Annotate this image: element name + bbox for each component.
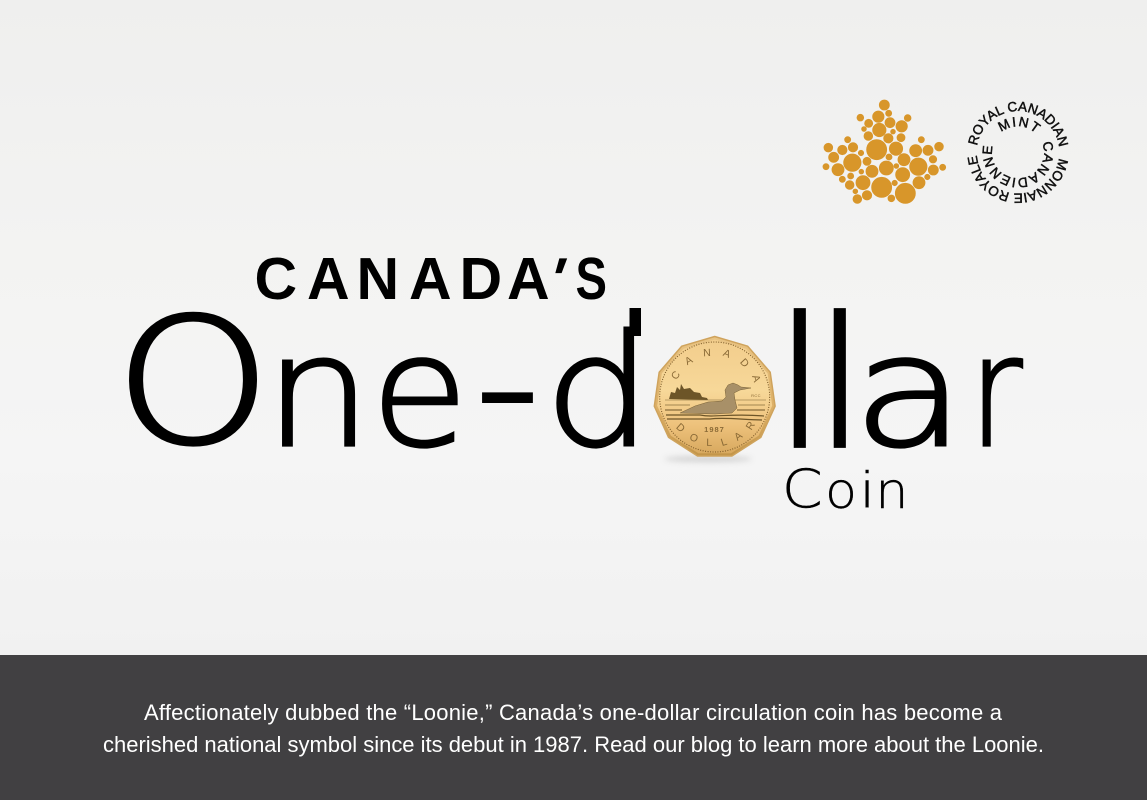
title: One-dollar: d — [544, 303, 652, 482]
subheading: Coin — [782, 459, 908, 521]
footer description text: Affectionately dubbed the “Loonie,” Canada’s one-dollar circulation coin has become a — [144, 700, 1003, 725]
title: One-dollar: o — [668, 291, 766, 478]
title: One-dollar: e — [371, 302, 468, 482]
icon: loonie coin — [654, 336, 776, 457]
subheading: Coin: i — [859, 462, 876, 519]
coin: loon — [680, 383, 751, 414]
title: One-dollar: O — [115, 282, 271, 484]
footer description text: cherished national symbol since its debut in 1987. Read our blog to learn more about the Loonie. — [103, 732, 1044, 757]
subheading: Coin: o — [825, 462, 857, 519]
title: One-dollar: - — [475, 281, 540, 490]
coin text: Canada: CANADA — [672, 348, 760, 383]
logo: maple leaf of gold circles — [823, 100, 946, 203]
title: One-dollar: l — [774, 279, 827, 489]
wordmark: Monnaie Royale: MONNAIE ROYALE — [967, 156, 1068, 204]
wordmark: Canadienne: CANADIENNE — [982, 142, 1054, 188]
title: One-dollar: n — [264, 303, 372, 482]
title: One-dollar — [115, 279, 1023, 490]
heading: Canada's: S — [576, 247, 607, 312]
coin text: artist initials: RCC — [751, 393, 761, 398]
footer band — [0, 655, 1147, 800]
coin: water lines — [665, 400, 766, 420]
heading: Canada's: ' — [539, 245, 574, 312]
title: One-dollar: a — [853, 303, 966, 482]
coin text: year: 1987 — [704, 425, 725, 434]
subheading: Coin: C — [782, 459, 823, 521]
heading: Canada's: CANADA — [254, 246, 550, 312]
title: One-dollar: l — [814, 279, 867, 489]
title: One-dollar: r — [969, 302, 1023, 482]
wordmark: Royal Canadian: ROYAL CANADIAN — [968, 102, 1068, 146]
logo: circular Royal Canadian Mint wordmark — [967, 102, 1068, 204]
wordmark: Mint: MINT — [998, 116, 1042, 132]
coin text: Dollar: DOLLAR — [676, 422, 755, 446]
coin shadow — [664, 456, 752, 462]
subheading: Coin: n — [875, 462, 908, 521]
coin: island — [669, 384, 708, 400]
footer description text — [103, 700, 1044, 757]
